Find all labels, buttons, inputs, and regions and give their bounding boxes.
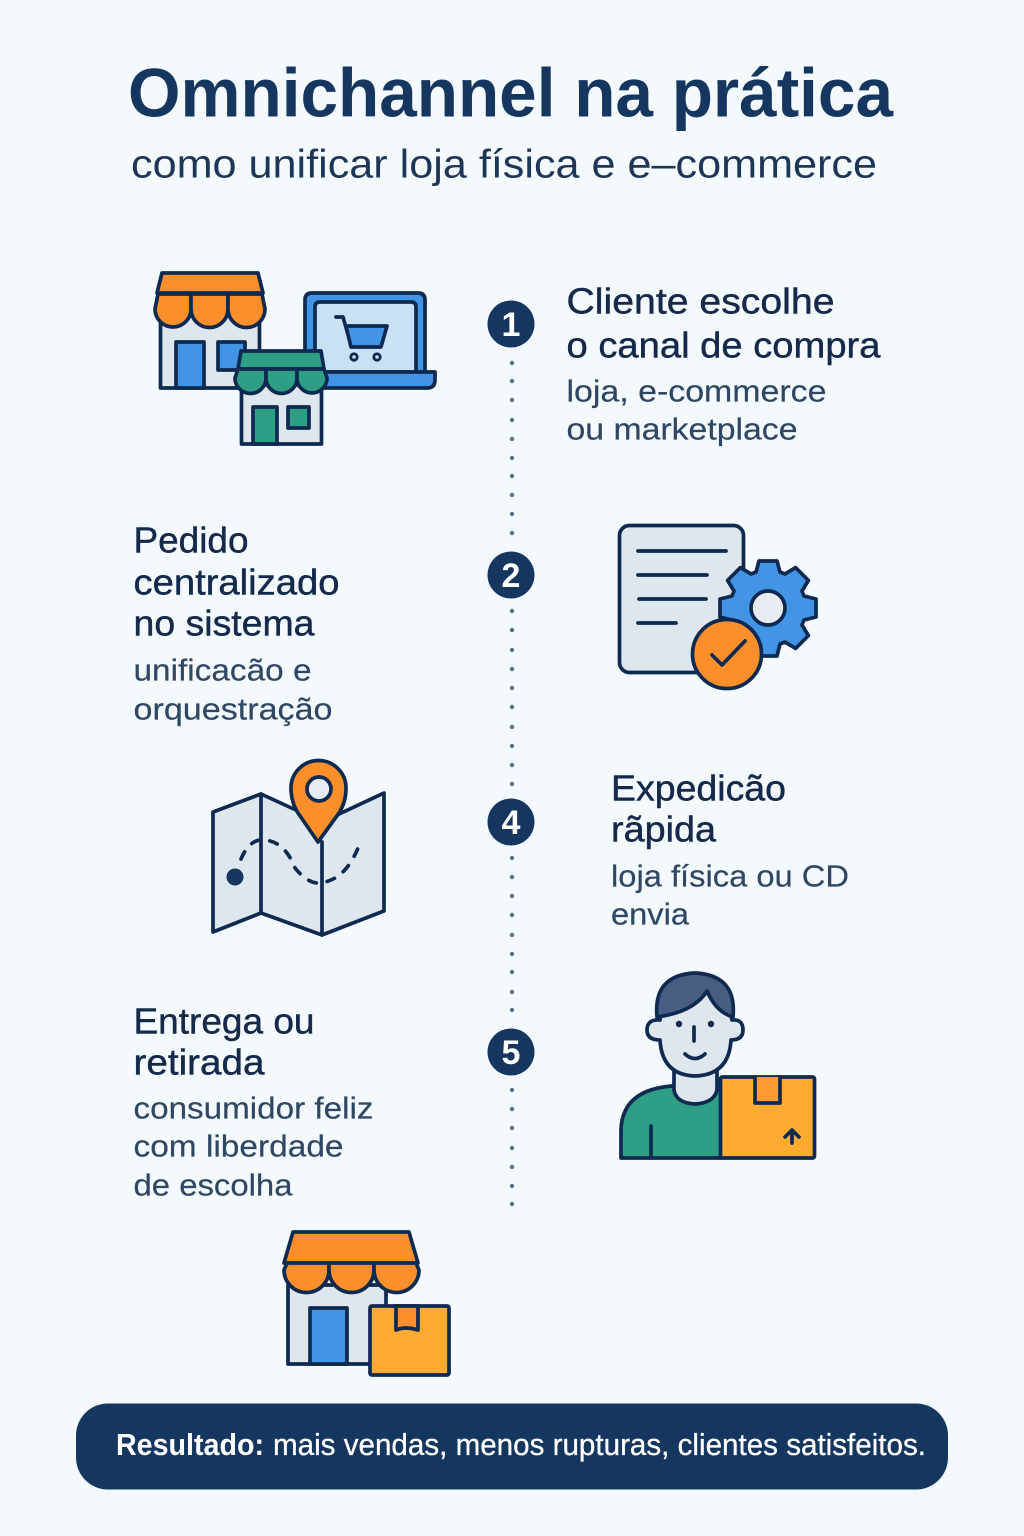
box (720, 1077, 814, 1158)
text: step 4: envia (611, 897, 690, 932)
subtitle: como unificar loja física e e–commerce (131, 142, 877, 186)
pin (291, 760, 346, 842)
check badge (692, 620, 762, 688)
step number 1: 1 (502, 306, 520, 344)
step number 1 (488, 300, 534, 348)
text: step 5: retirada (134, 1042, 266, 1083)
icon: document, gear and check (620, 526, 816, 688)
text: step 2: orquestração (134, 692, 332, 727)
text: step 2: Pedido (134, 520, 248, 561)
title: Omnichannel na prática (128, 54, 894, 132)
text: step 1: Cliente escolhe (566, 281, 834, 322)
icon: person with box (621, 973, 814, 1158)
result banner: mais vendas, menos rupturas, clientes satisfeitos. (273, 1427, 926, 1462)
text: step 2: centralizado (134, 562, 340, 603)
result banner (76, 1404, 948, 1490)
text: step 1: ou marketplace (566, 412, 798, 447)
icon: stores and laptop (155, 273, 435, 444)
green store (235, 351, 327, 444)
icon: store with package (284, 1232, 449, 1375)
text: step 2: unificacão e (134, 653, 312, 688)
step number 4: 4 (502, 804, 521, 842)
text: step 2: no sistema (134, 603, 316, 644)
text: step 1: o canal de compra (566, 325, 882, 366)
text: step 5: consumidor feliz (134, 1091, 374, 1126)
gear (720, 561, 816, 656)
icon: map with pin (213, 760, 384, 935)
text: step 5: com liberdade (134, 1129, 344, 1164)
text: step 4: loja física ou CD (611, 859, 849, 894)
package (370, 1306, 449, 1375)
timeline dotted line (510, 361, 514, 1206)
step number 4 (488, 798, 534, 846)
text: step 1: loja, e-commerce (566, 374, 826, 409)
text: step 5: de escolha (134, 1168, 293, 1203)
text: step 5 (134, 1001, 374, 1203)
text: step 4: Expedicão (611, 768, 786, 809)
result banner: Resultado: (116, 1427, 264, 1462)
text: step 1 (566, 281, 882, 447)
laptop (305, 293, 435, 388)
text: step 4: rãpida (611, 809, 717, 850)
step number 2 (488, 552, 534, 598)
step number 2: 2 (502, 557, 520, 595)
text: step 4 (611, 768, 849, 932)
text: step 2 (134, 520, 340, 727)
orange store (155, 273, 265, 388)
step number 5 (488, 1028, 534, 1076)
step number 5: 5 (502, 1034, 520, 1072)
text: step 5: Entrega ou (134, 1001, 314, 1042)
